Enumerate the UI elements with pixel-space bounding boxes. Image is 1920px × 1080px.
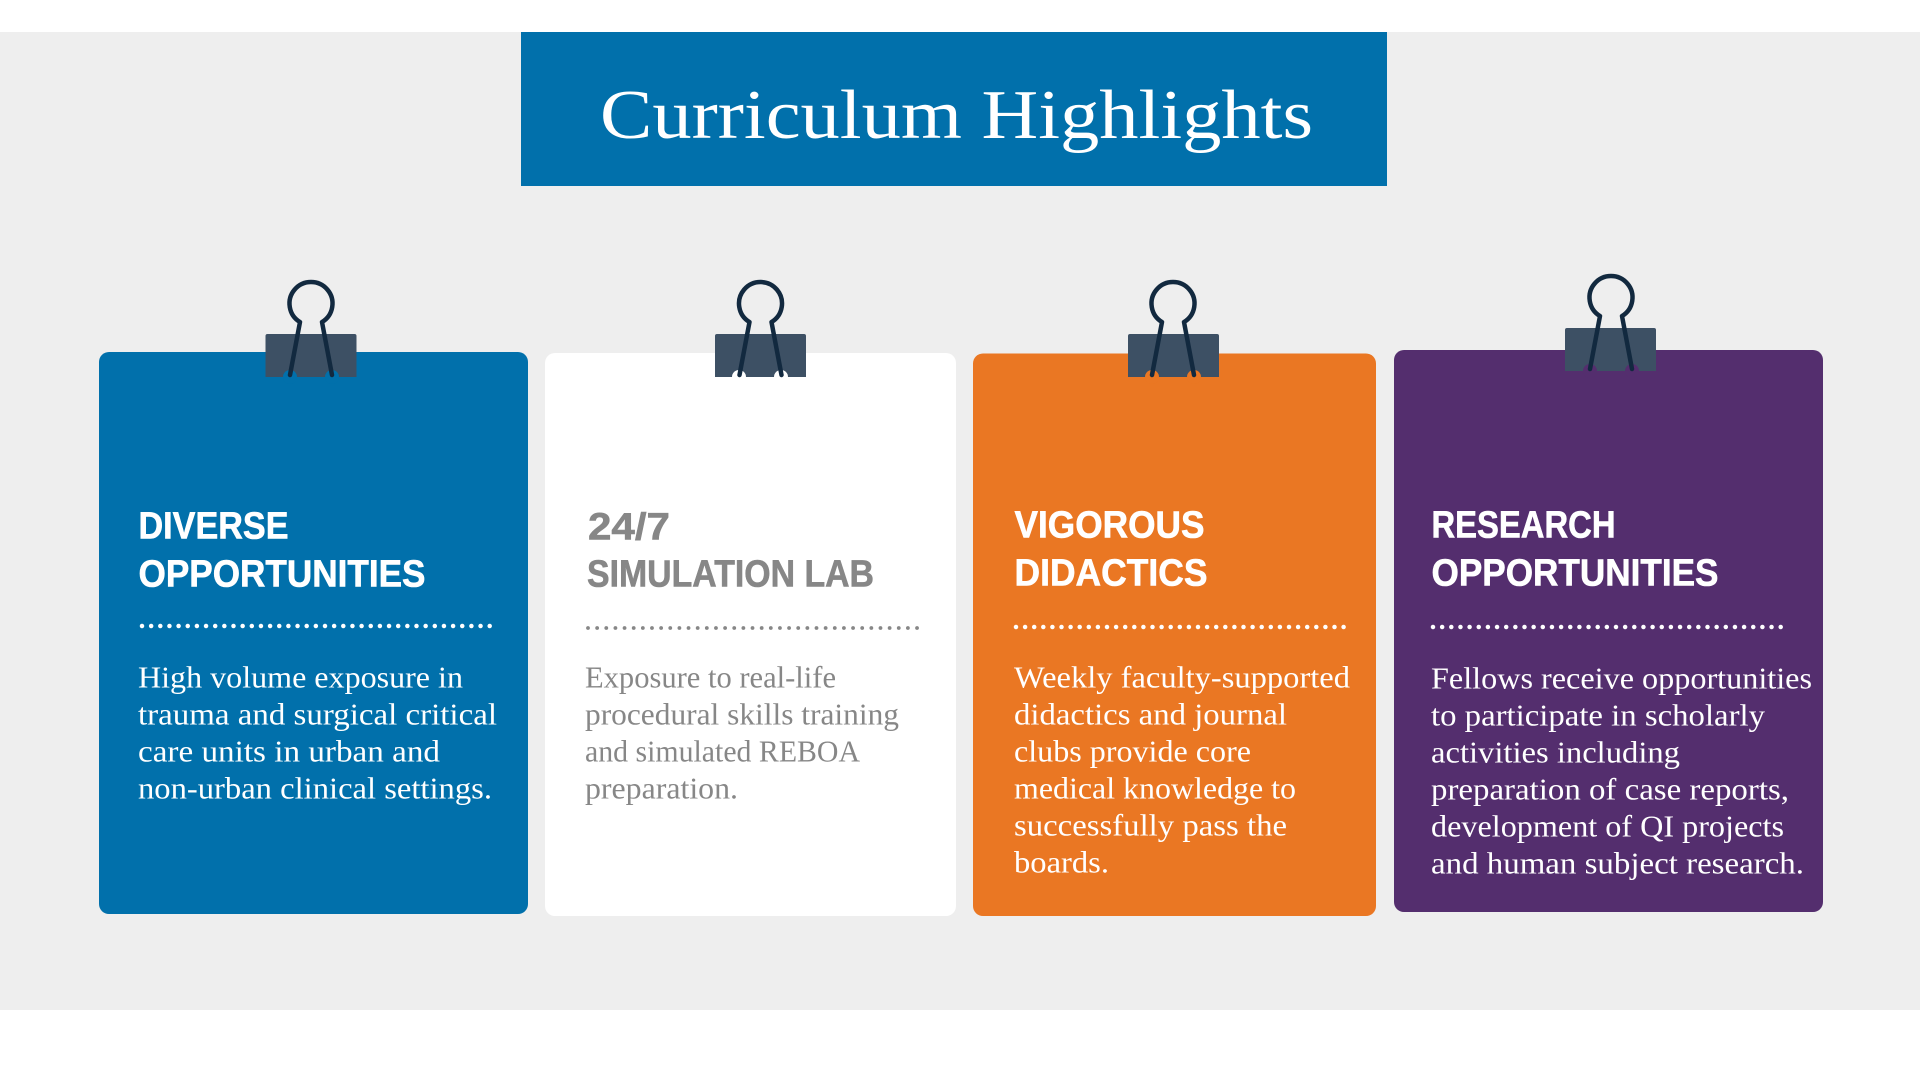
body text: preparation. (585, 770, 738, 806)
heading: OPPORTUNITIES (138, 554, 426, 596)
heading (587, 506, 874, 596)
body text: successfully pass the (1014, 808, 1287, 842)
body text: Weekly faculty-supported (1014, 660, 1351, 694)
body text: clubs provide core (1014, 734, 1251, 768)
body text: Exposure to real-life (585, 660, 836, 694)
body text: didactics and journal (1014, 696, 1287, 732)
body text: activities including (1431, 734, 1680, 770)
body text: development of QI projects (1431, 808, 1784, 844)
heading (1432, 504, 1718, 594)
body text (138, 660, 497, 806)
body text: procedural skills training (585, 696, 899, 732)
body text (1431, 660, 1812, 880)
heading: VIGOROUS (1014, 504, 1204, 546)
icon: binder clip (1128, 282, 1219, 384)
body text: High volume exposure in (138, 660, 464, 694)
body text: to participate in scholarly (1431, 698, 1766, 732)
panel: research opportunities (1394, 276, 1823, 912)
panel: vigorous didactics (973, 282, 1376, 916)
heading (1014, 504, 1208, 594)
heading: DIDACTICS (1014, 552, 1208, 594)
title: Curriculum Highlights (600, 77, 1313, 154)
heading: SIMULATION LAB (587, 554, 874, 596)
icon: binder clip (715, 282, 806, 384)
body text (585, 660, 899, 806)
body text: and simulated REBOA (585, 734, 861, 768)
heading: 24/7 (588, 506, 670, 548)
body text: non-urban clinical settings. (138, 770, 492, 806)
card background (1394, 350, 1823, 912)
card background (973, 354, 1376, 916)
panel: diverse opportunities (99, 282, 528, 914)
card background (545, 353, 956, 916)
icon: binder clip (266, 282, 356, 384)
panel: 24/7 simulation lab (545, 282, 956, 916)
body text: boards. (1014, 844, 1109, 880)
title banner (521, 32, 1387, 186)
body text: trauma and surgical critical (138, 696, 497, 732)
body text: preparation of case reports, (1431, 772, 1789, 806)
body text: medical knowledge to (1014, 770, 1296, 806)
heading: DIVERSE (138, 506, 288, 548)
icon: binder clip (1565, 276, 1656, 378)
body text: and human subject research. (1431, 846, 1804, 880)
heading: RESEARCH (1432, 504, 1616, 546)
heading: OPPORTUNITIES (1432, 552, 1718, 594)
heading (138, 506, 426, 596)
card background (99, 352, 528, 914)
body text: Fellows receive opportunities (1431, 660, 1812, 696)
body text: care units in urban and (138, 734, 441, 768)
body text (1014, 660, 1351, 880)
